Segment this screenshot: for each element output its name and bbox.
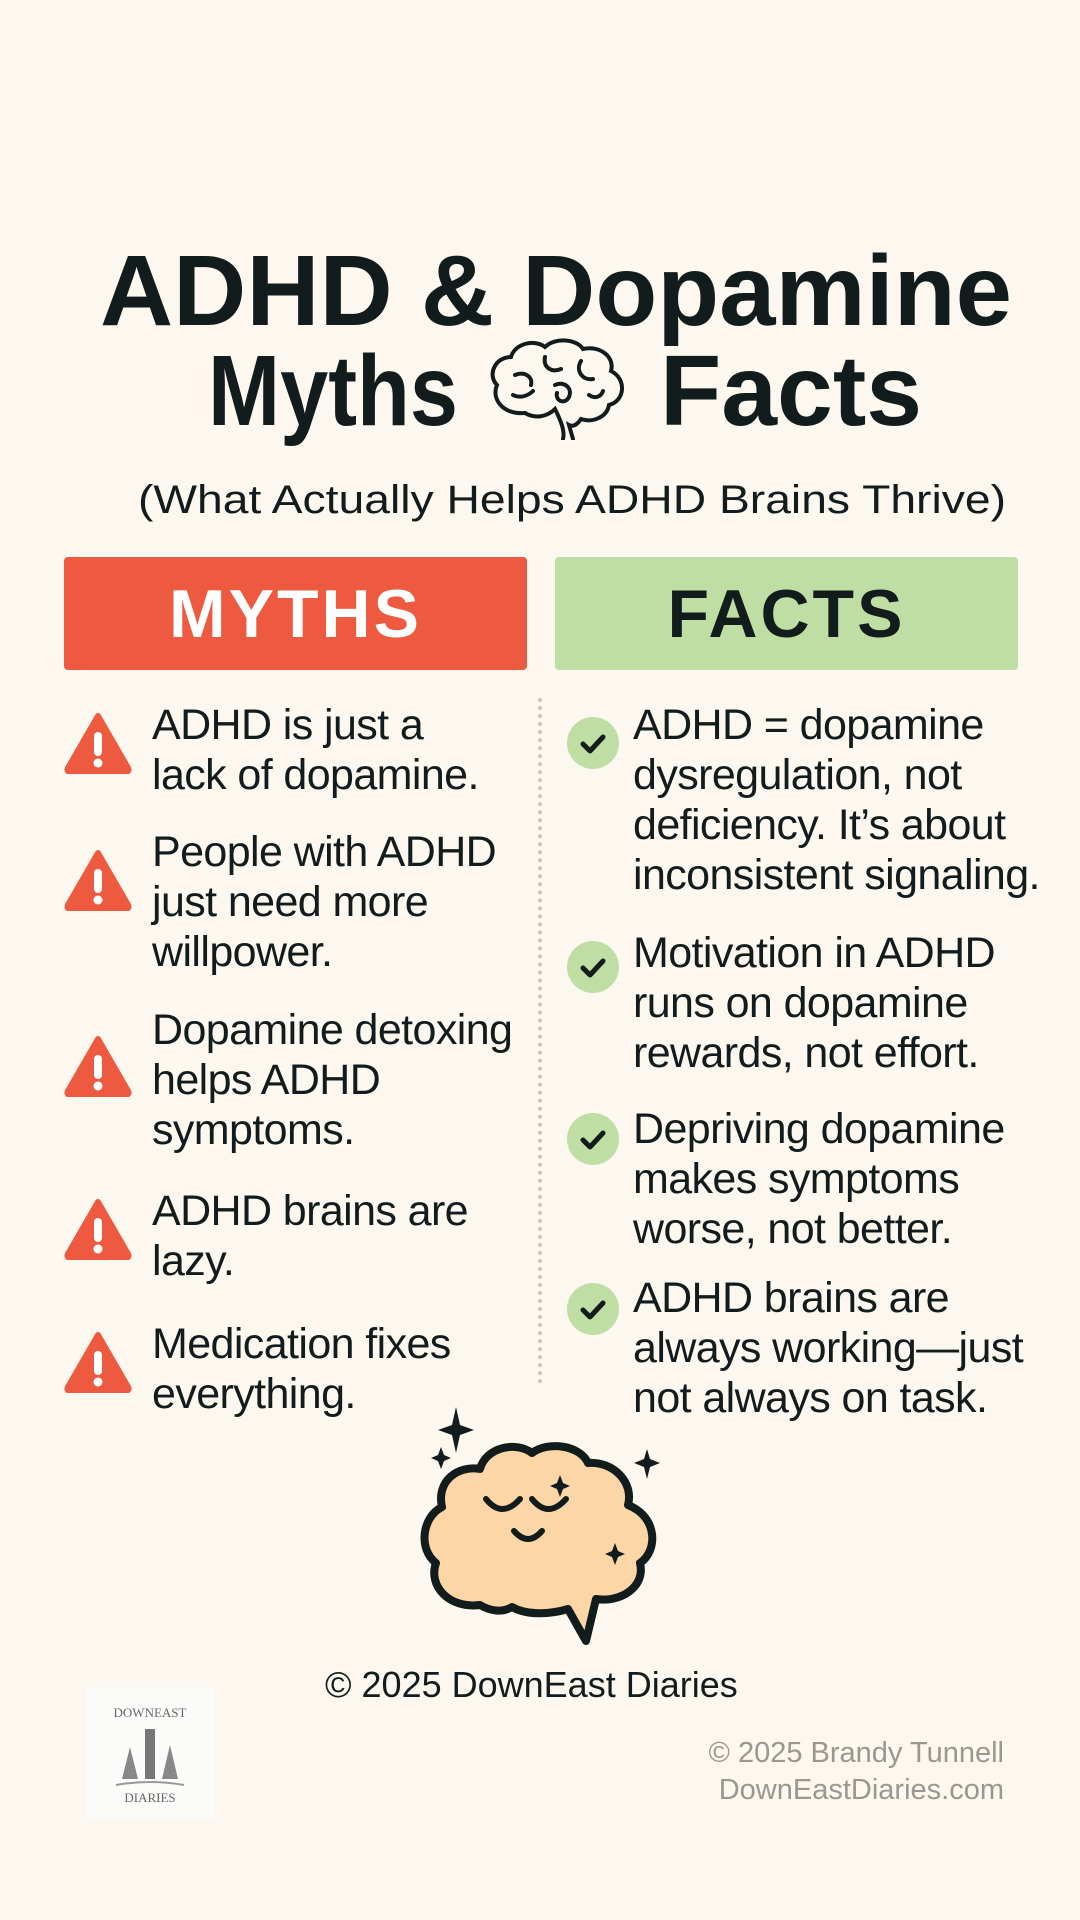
myth 2: willpower. — [152, 928, 332, 976]
myth 1 — [64, 701, 479, 799]
header: facts: FACTS — [668, 576, 905, 652]
fact 4: ADHD brains are — [633, 1274, 949, 1322]
footer: author — [708, 1737, 1004, 1806]
fact 1: deficiency. It’s about — [633, 801, 1005, 849]
title: Myths — [208, 335, 458, 447]
title: Facts — [660, 335, 922, 447]
myth 4: lazy. — [152, 1237, 234, 1285]
logo: DownEast Diaries — [86, 1687, 214, 1818]
title: ADHD & Dopamine — [100, 235, 1012, 347]
myth 2: People with ADHD — [152, 828, 496, 876]
subtitle: (What Actually Helps ADHD Brains Thrive) — [138, 478, 1006, 522]
myth 2: just need more — [152, 878, 428, 926]
logo: DownEast Diaries: DIARIES — [124, 1790, 176, 1805]
fact 1: inconsistent signaling. — [633, 851, 1040, 899]
fact 2: rewards, not effort. — [633, 1029, 979, 1077]
panel: myths — [64, 701, 512, 1418]
fact 1: dysregulation, not — [633, 751, 962, 799]
myth 3: symptoms. — [152, 1106, 354, 1154]
myth 5: Medication fixes — [152, 1320, 451, 1368]
icon: brain outline — [490, 338, 624, 440]
fact 4 — [567, 1274, 1024, 1422]
fact 4: not always on task. — [633, 1374, 987, 1422]
title — [100, 235, 1012, 447]
illustration: smiling brain with sparkles — [420, 1407, 660, 1645]
fact 4: always working—just — [633, 1324, 1023, 1372]
logo: DownEast Diaries: DOWNEAST — [114, 1705, 187, 1720]
fact 3: worse, not better. — [633, 1205, 952, 1253]
myth 2 — [64, 828, 496, 976]
myth 3: helps ADHD — [152, 1056, 380, 1104]
myth 5 — [64, 1320, 451, 1418]
myth 1: ADHD is just a — [152, 701, 423, 749]
myth 5: everything. — [152, 1370, 356, 1418]
divider — [538, 698, 542, 1384]
fact 2 — [567, 929, 995, 1077]
header: myths — [64, 557, 527, 670]
myth 4: ADHD brains are — [152, 1187, 468, 1235]
fact 3: makes symptoms — [633, 1155, 959, 1203]
myth 4 — [64, 1187, 468, 1285]
fact 1 — [567, 701, 1040, 899]
panel: facts — [567, 701, 1040, 1422]
footer: author: © 2025 Brandy Tunnell — [709, 1737, 1004, 1769]
myth 3 — [64, 1006, 512, 1154]
fact 1: ADHD = dopamine — [633, 701, 984, 749]
header: facts — [555, 557, 1018, 670]
header: myths: MYTHS — [169, 576, 422, 652]
footer: author: DownEastDiaries.com — [719, 1774, 1004, 1806]
myth 1: lack of dopamine. — [152, 751, 479, 799]
fact 3: Depriving dopamine — [633, 1105, 1005, 1153]
fact 2: Motivation in ADHD — [633, 929, 995, 977]
fact 2: runs on dopamine — [633, 979, 968, 1027]
fact 3 — [567, 1105, 1005, 1253]
footer credit: © 2025 DownEast Diaries — [325, 1664, 738, 1705]
myth 3: Dopamine detoxing — [152, 1006, 512, 1054]
